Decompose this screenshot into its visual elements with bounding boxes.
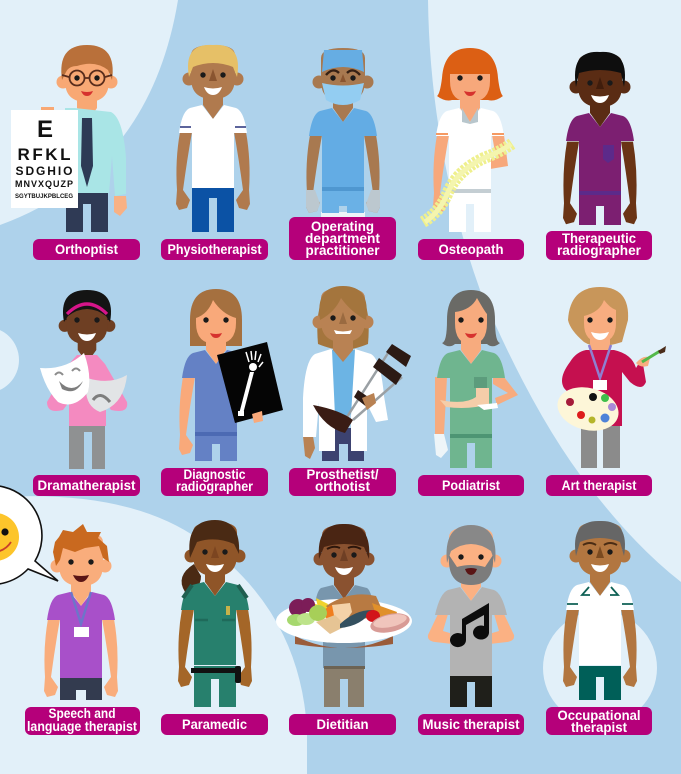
icon: music note	[450, 603, 489, 647]
icon: eye chart	[11, 107, 78, 208]
label: therapeutic radiographer: radiographer	[557, 243, 642, 258]
icon: eye chart: RFKL	[18, 145, 70, 164]
icon: eye chart: SGYTBUJKPBLCEG	[15, 194, 73, 200]
label: occupational therapist: therapist	[571, 720, 627, 735]
figure: speech and language therapist	[44, 524, 118, 700]
label: orthoptist: Orthoptist	[55, 242, 118, 257]
figure: dramatherapist	[40, 290, 127, 469]
icon: theatre masks	[40, 353, 127, 412]
background: left circle	[0, 327, 19, 393]
label: speech and language therapist: language therapist	[27, 719, 137, 734]
background: top left light area	[0, 0, 178, 225]
label: operating department practitioner	[289, 217, 396, 260]
label: music therapist	[418, 714, 524, 735]
label: prosthetist/orthotist	[289, 467, 396, 496]
icon: food plate	[276, 594, 412, 648]
icon: paintbrush	[636, 346, 666, 367]
figure: osteopath	[423, 48, 513, 232]
figure: orthoptist	[11, 45, 127, 232]
label: dramatherapist	[33, 475, 140, 496]
figure: therapeutic radiographer	[563, 52, 637, 225]
figure: dietitian	[276, 524, 412, 707]
background: right light area	[428, 0, 681, 582]
label: therapeutic radiographer	[546, 231, 652, 260]
label: occupational therapist: Occupational	[558, 708, 640, 723]
label: occupational therapist	[546, 707, 652, 735]
label: physiotherapist: Physiotherapist	[168, 242, 262, 257]
label: diagnostic radiographer: radiographer	[176, 479, 254, 494]
label: art therapist: Art therapist	[562, 478, 637, 493]
label: music therapist: Music therapist	[422, 717, 520, 732]
icon: speech bubble with smiley	[0, 486, 58, 584]
label: osteopath: Osteopath	[438, 242, 504, 257]
figure: art therapist	[553, 287, 666, 468]
label: physiotherapist	[161, 239, 268, 260]
label: dramatherapist: Dramatherapist	[38, 478, 136, 493]
figure: prosthetist/orthotist	[303, 286, 411, 461]
icon: foot	[440, 377, 498, 410]
label: osteopath	[418, 239, 524, 260]
background: circle behind occupational therapist	[543, 611, 657, 725]
label: operating department practitioner: department	[305, 231, 381, 246]
figure: occupational therapist	[563, 521, 637, 700]
label: speech and language therapist: Speech and	[48, 706, 116, 721]
label: operating department practitioner: practitioner	[306, 243, 380, 258]
icon: eye chart: SDGHIO	[16, 164, 72, 178]
label: speech and language therapist	[25, 706, 140, 735]
figure: music therapist	[428, 525, 514, 707]
figure: paramedic	[178, 520, 252, 707]
figure: podiatrist	[434, 290, 518, 468]
figure: physiotherapist	[176, 45, 250, 232]
figure: operating department practitioner	[306, 48, 380, 218]
icon: x-ray	[217, 342, 283, 423]
background: bottom left light area	[0, 496, 307, 774]
label: podiatrist: Podiatrist	[442, 478, 500, 493]
label: paramedic	[161, 714, 268, 735]
label: therapeutic radiographer: Therapeutic	[562, 231, 636, 246]
label: dietitian: Dietitian	[316, 717, 368, 732]
figure: diagnostic radiographer	[179, 289, 283, 461]
icon: spine	[423, 143, 513, 222]
icon: paint palette	[553, 381, 623, 437]
icon: eye chart: MNVXQUZP	[15, 179, 73, 189]
label: operating department practitioner: Operating	[311, 219, 374, 234]
label: prosthetist/orthotist: Prosthetist/	[306, 467, 379, 482]
label: diagnostic radiographer	[161, 467, 268, 496]
label: diagnostic radiographer: Diagnostic	[184, 467, 246, 482]
label: art therapist	[546, 475, 652, 496]
icon: eye chart: E	[37, 116, 53, 143]
label: prosthetist/orthotist: orthotist	[315, 479, 370, 494]
label: podiatrist	[418, 475, 524, 496]
label: orthoptist	[33, 239, 140, 260]
label: paramedic: Paramedic	[182, 717, 247, 732]
icon: crutch and prosthetic arm	[313, 344, 411, 433]
label: dietitian	[289, 714, 396, 735]
